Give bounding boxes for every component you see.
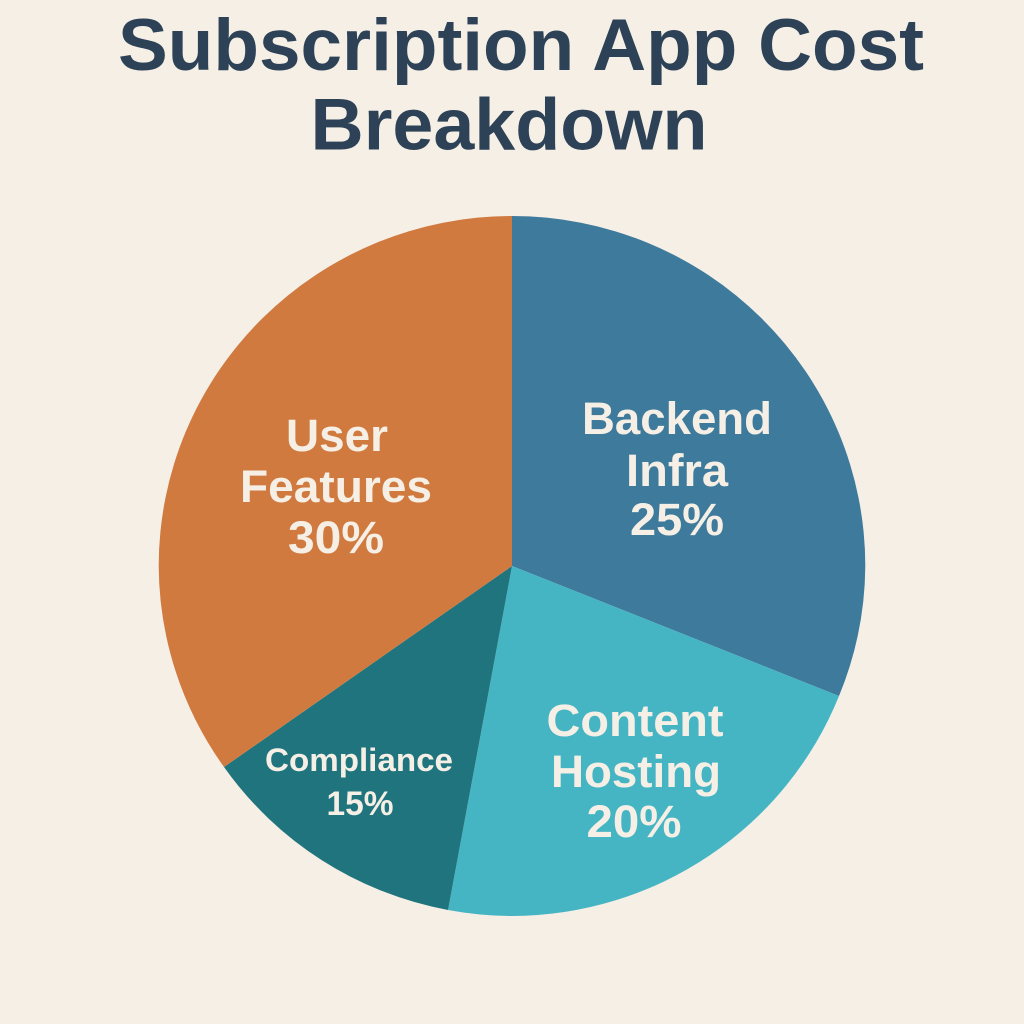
label: content hosting: 20% (586, 796, 682, 847)
label: backend infra (582, 393, 772, 545)
label: backend infra: Backend (582, 393, 772, 444)
label: content hosting: Hosting (551, 746, 721, 797)
title: Breakdown (310, 84, 708, 166)
slice: compliance (224, 566, 512, 910)
label: content hosting (546, 695, 724, 847)
label: compliance: Compliance (265, 742, 453, 778)
label: content hosting: Content (546, 695, 724, 746)
label: backend infra: Infra (626, 445, 729, 496)
label: compliance (265, 742, 453, 823)
slice: backend infra (512, 216, 865, 696)
slice: content hosting (448, 566, 839, 916)
pie chart (159, 216, 865, 916)
label: user features: 30% (288, 512, 384, 563)
title: Subscription App Cost (118, 5, 924, 86)
label: user features: Features (240, 461, 432, 512)
slice: user features (159, 216, 512, 767)
title (118, 5, 924, 166)
label: user features: User (286, 410, 388, 461)
label: compliance: 15% (326, 785, 394, 823)
label: user features (240, 410, 432, 563)
label: backend infra: 25% (630, 494, 724, 545)
